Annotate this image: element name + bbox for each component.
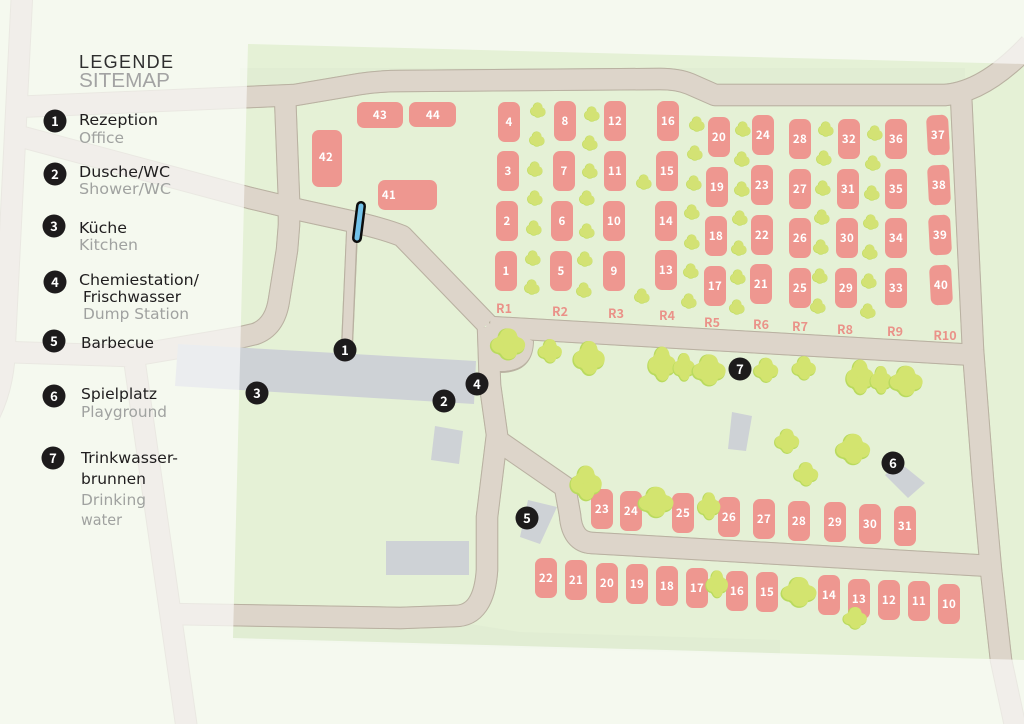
row labels: R4 [659, 305, 676, 324]
row R9: 35 [889, 181, 903, 197]
legend item 7: Drinking [81, 491, 146, 509]
legend item 3: Kitchen [79, 236, 138, 254]
row R5: 18 [709, 228, 723, 244]
row R7: 28 [793, 131, 807, 147]
row labels [496, 298, 957, 344]
small shrubs between pitches [524, 102, 883, 319]
marker 1: 1 [341, 340, 349, 359]
darker ground bands [233, 68, 965, 655]
lower pitch row 23 to 31 [591, 489, 916, 546]
row R6: 21 [754, 276, 768, 292]
lower pitch row 23 to 31: 24 [624, 503, 638, 519]
row R3: 12 [608, 113, 622, 129]
building: shower block [431, 426, 463, 464]
legend item 2: Shower/WC [79, 180, 171, 198]
row R5: 17 [708, 278, 722, 294]
marker 2 [432, 390, 456, 412]
row R3: 11 [608, 163, 622, 179]
row R1: 3 [504, 163, 512, 179]
row R4: 15 [660, 163, 674, 179]
legend item 1: Office [79, 129, 124, 147]
legend item 1: 1 [51, 111, 59, 130]
pitch 44 [409, 102, 456, 127]
row R4: 13 [659, 262, 673, 278]
lower pitch row 22 to 10: 21 [569, 572, 583, 588]
row R7: 27 [793, 181, 807, 197]
row R6: 24 [756, 127, 770, 143]
marker 2: 2 [440, 391, 448, 410]
lower pitch row 22 to 10: 11 [912, 593, 926, 609]
lower pitch row 22 to 10: 15 [760, 584, 774, 600]
row R10: 40 [934, 277, 948, 293]
row R1: 1 [502, 263, 510, 279]
building: main hall [175, 344, 476, 404]
row R2: 5 [557, 263, 565, 279]
row R4: 14 [659, 213, 673, 229]
building: lower left [386, 541, 469, 575]
legend item 5: Barbecue [81, 334, 154, 352]
row R4: 16 [661, 113, 675, 129]
lower pitch row 22 to 10: 22 [539, 570, 553, 586]
legend title [79, 52, 173, 92]
row R2: 6 [558, 213, 566, 229]
legend item 6: 6 [50, 386, 58, 405]
row R8: 31 [841, 181, 855, 197]
row labels: R9 [887, 321, 903, 340]
legend item 1: Rezeption [79, 111, 158, 129]
map markers [246, 338, 904, 530]
row R9 [885, 119, 907, 308]
pitch 41 [378, 180, 437, 210]
row labels: R8 [837, 319, 853, 338]
lower pitch row 23 to 31: 25 [676, 505, 690, 521]
row labels: R7 [792, 316, 808, 335]
pitch 42 [312, 130, 342, 187]
legend item 3: 3 [50, 216, 58, 235]
legend item 7: Trinkwasser- [80, 449, 178, 467]
legend item 7: water [81, 511, 123, 529]
row labels: R2 [552, 301, 568, 320]
lower pitch row 22 to 10: 14 [822, 587, 836, 603]
legend item 7: brunnen [81, 470, 146, 488]
lower pitch row 22 to 10: 10 [942, 596, 956, 612]
legend item 4 [44, 270, 200, 323]
grey service buildings [175, 344, 925, 575]
row R7 [789, 119, 811, 308]
legend item 2: 2 [51, 164, 59, 183]
lower pitch row 22 to 10: 17 [690, 580, 704, 596]
marker 4 [466, 372, 488, 396]
lower pitch row 23 to 31: 31 [898, 518, 912, 534]
marker 1 [334, 338, 356, 362]
marker 7 [728, 358, 752, 380]
row R8 [835, 119, 860, 308]
legend item 2: Dusche/WC [79, 163, 170, 181]
row R1: 2 [503, 213, 511, 229]
legend item 4: Chemiestation/ [79, 271, 200, 289]
row R3: 10 [607, 213, 621, 229]
marker 6 [882, 452, 904, 474]
lower pitch row 23 to 31: 29 [828, 514, 842, 530]
legend item 6 [42, 384, 167, 421]
lower pitch row 22 to 10: 16 [730, 583, 744, 599]
row R10: 37 [931, 127, 945, 143]
legend item 3 [42, 214, 138, 254]
row R1: 4 [505, 114, 513, 130]
legend item 6: Spielplatz [81, 385, 157, 403]
legend title: SITEMAP [79, 70, 170, 92]
row R6 [750, 115, 774, 304]
pitches 41 to 44 [312, 102, 456, 210]
pitch 43 [357, 102, 403, 128]
row R2: 7 [560, 163, 568, 179]
lower pitch row 22 to 10: 13 [852, 591, 866, 607]
row R9: 36 [889, 131, 903, 147]
row R10: 38 [932, 177, 946, 193]
lower pitch row 22 to 10: 20 [600, 575, 614, 591]
pitch 41: 41 [382, 187, 396, 203]
marker 4: 4 [473, 374, 481, 393]
row labels: R6 [753, 314, 769, 333]
marker 5 [516, 506, 538, 530]
row R8: 30 [840, 230, 854, 246]
row R2 [550, 101, 576, 291]
row labels: R10 [933, 325, 957, 344]
bridge [357, 206, 361, 238]
marker 6: 6 [889, 453, 897, 472]
building: barbecue [520, 500, 557, 544]
row R9: 33 [889, 280, 903, 296]
legend item 5: 5 [50, 331, 58, 350]
large trees [490, 328, 923, 630]
legend item 2 [44, 162, 171, 198]
row R2: 8 [561, 113, 569, 129]
row R10 [926, 114, 953, 306]
row R3 [603, 101, 626, 291]
row R8: 32 [842, 131, 856, 147]
lower pitch row 22 to 10: 19 [630, 576, 644, 592]
building: playground [885, 462, 925, 498]
legend [42, 52, 200, 529]
row R5: 20 [712, 129, 726, 145]
row R3: 9 [610, 263, 618, 279]
row R9: 34 [889, 230, 903, 246]
row R1 [495, 102, 520, 291]
pitch rows R1 to R10 [495, 101, 953, 308]
row labels: R1 [496, 298, 512, 317]
lower pitch row 23 to 31: 28 [792, 513, 806, 529]
lower pitch row 22 to 10: 12 [882, 592, 896, 608]
legend item 7 [42, 446, 178, 529]
lower pitch row 23 to 31: 23 [595, 501, 609, 517]
marker 7: 7 [736, 359, 744, 378]
marker 5: 5 [523, 508, 531, 527]
row R4 [655, 101, 679, 290]
row R7: 25 [793, 280, 807, 296]
row R6: 22 [755, 227, 769, 243]
legend item 3: Küche [79, 219, 127, 237]
pitch 43: 43 [373, 107, 387, 123]
row R5 [704, 117, 730, 306]
lower pitch row 22 to 10: 18 [660, 578, 674, 594]
legend title: LEGENDE [79, 52, 173, 72]
row R8: 29 [839, 280, 853, 296]
legend item 4: 4 [51, 272, 59, 291]
row R5: 19 [710, 179, 724, 195]
legend item 7: 7 [49, 448, 57, 467]
building: central field [728, 412, 752, 451]
lower pitch row 23 to 31: 27 [757, 511, 771, 527]
legend item 1 [44, 110, 158, 147]
row R7: 26 [793, 230, 807, 246]
lower pitch row 22 to 10 [535, 558, 960, 624]
row labels: R5 [704, 312, 720, 331]
marker 3: 3 [253, 383, 261, 402]
row labels: R3 [608, 303, 624, 322]
pitch 42: 42 [319, 149, 333, 165]
marker 3 [246, 382, 268, 404]
row R10: 39 [933, 227, 947, 243]
legend item 5 [42, 330, 154, 352]
legend item 6: Playground [81, 403, 167, 421]
legend item 4: Frischwasser [83, 288, 182, 306]
pitch 44: 44 [426, 107, 440, 123]
legend item 4: Dump Station [83, 305, 189, 323]
lower pitch row 23 to 31: 26 [722, 509, 736, 525]
row R6: 23 [755, 177, 769, 193]
lower pitch row 23 to 31: 30 [863, 516, 877, 532]
